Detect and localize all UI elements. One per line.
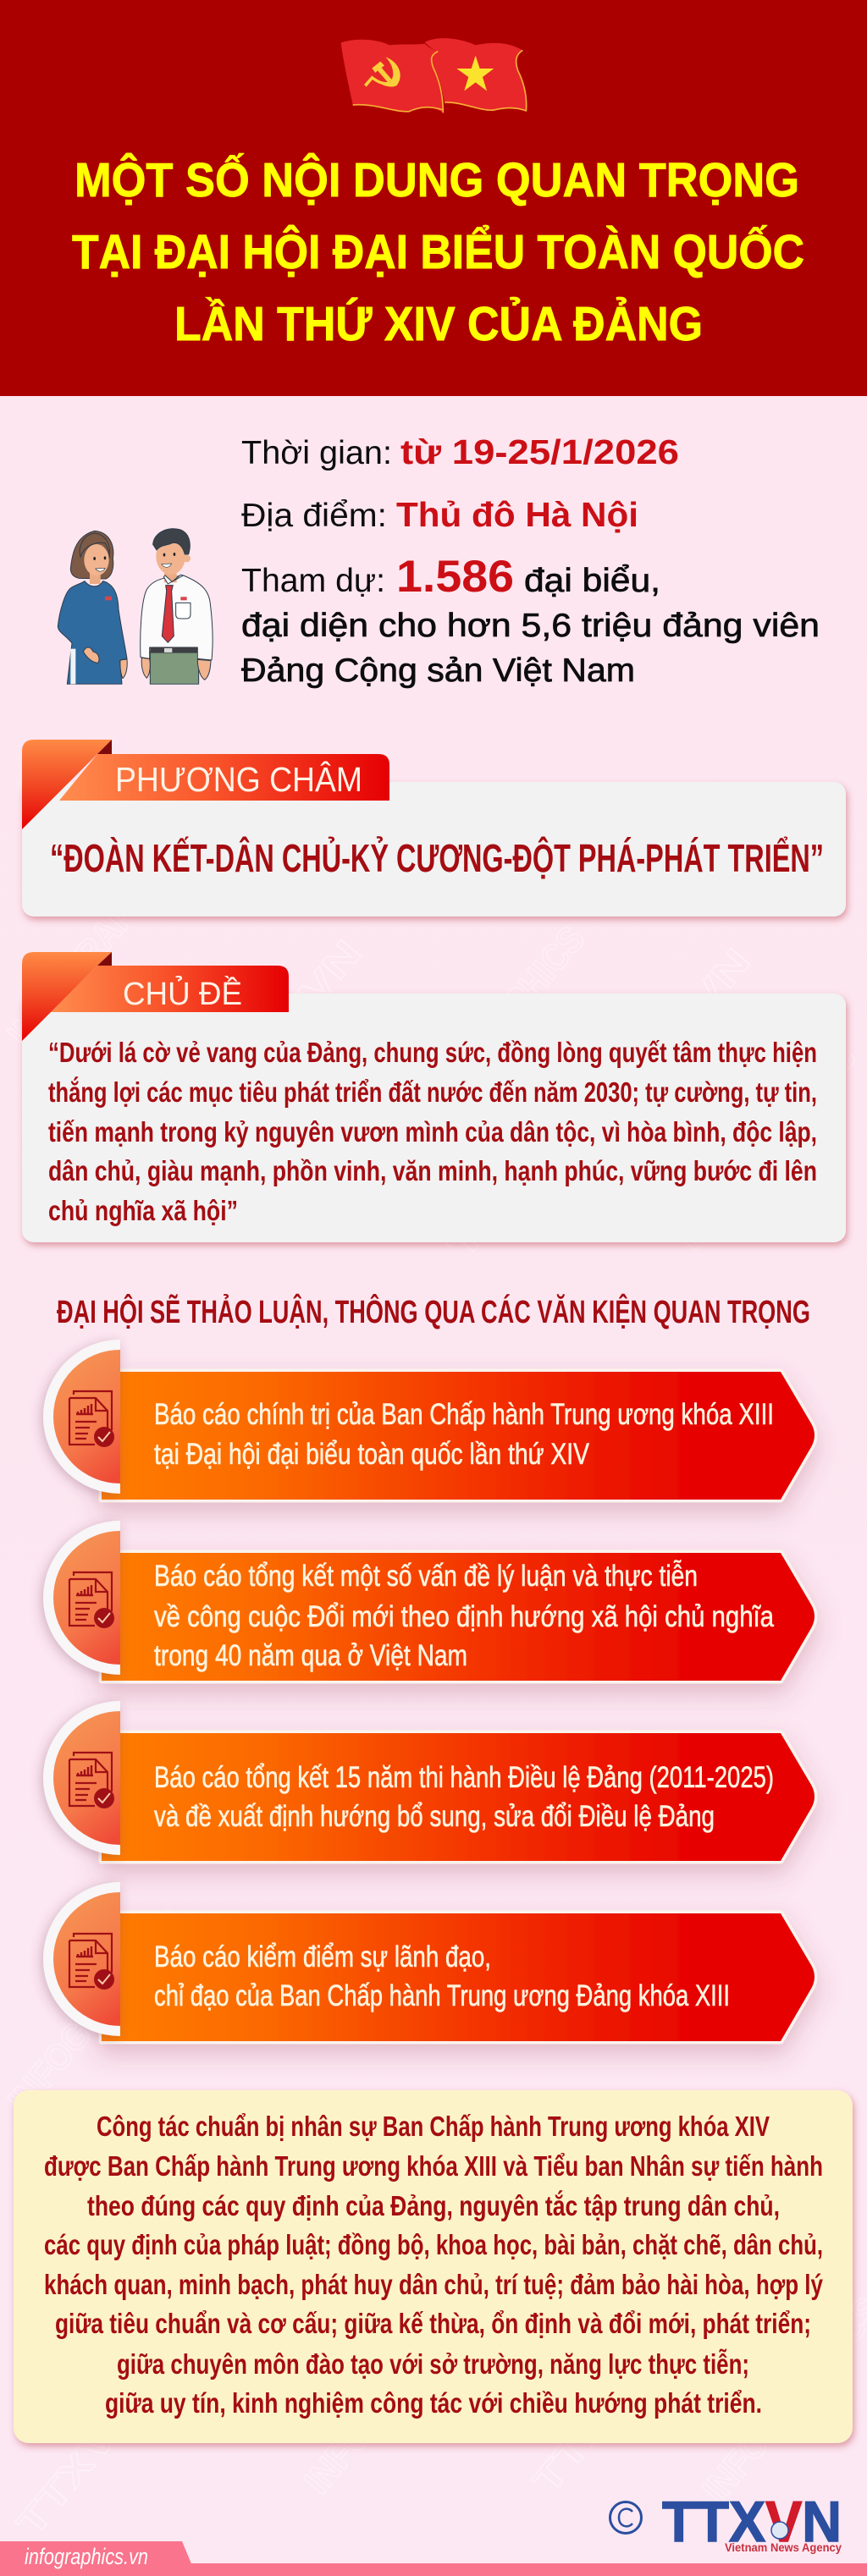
- title: LẦN THỨ XIV CỦA ĐẢNG: [174, 296, 703, 351]
- decorative watermark layer: TTXVN: [440, 1110, 581, 1266]
- time line: [241, 432, 679, 471]
- document item 4: [43, 1882, 815, 2041]
- icon: report document: [69, 1934, 114, 1990]
- icon: report document: [69, 1572, 114, 1628]
- attendance: đại biểu,: [524, 563, 660, 599]
- venue line: Địa điểm:: [241, 498, 387, 534]
- text: report 3: và đề xuất định hướng bổ sung, sửa đổi Điều lệ Đảng: [154, 1800, 715, 1833]
- text: report 2: Báo cáo tổng kết một số vấn đề lý luận và thực tiễn: [154, 1560, 698, 1593]
- decorative watermark layer: TTXVN: [8, 2388, 149, 2544]
- panel: personnel preparation note: [14, 2090, 853, 2443]
- text: report 4: [154, 1940, 730, 2012]
- text: report 1: [154, 1398, 774, 1471]
- venue line: [241, 495, 638, 534]
- text: report 3: [154, 1761, 774, 1833]
- decorative watermark layer: TTXVN: [525, 2346, 665, 2502]
- theme text: chủ nghĩa xã hội”: [48, 1195, 238, 1226]
- woman delegate: [58, 531, 127, 684]
- attendance: Tham dự:: [241, 563, 385, 599]
- illustration: two delegates: [58, 529, 213, 684]
- header banner: [0, 0, 867, 396]
- footer band: [0, 2541, 867, 2576]
- ribbon: chủ đề: CHỦ ĐỀ: [123, 975, 242, 1012]
- decorative watermark layer: TTXVN: [229, 933, 369, 1088]
- text: report 2: [154, 1560, 774, 1672]
- ribbon: phương châm: PHƯƠNG CHÂM: [115, 760, 362, 799]
- decorative watermark layer: INFOGRAPHICS: [0, 1900, 195, 2121]
- icon: party and national flags: [341, 38, 527, 113]
- theme text: [48, 1037, 817, 1226]
- footer source: infographics.vn: [25, 2544, 148, 2569]
- man delegate: [141, 529, 213, 684]
- document item 3: [43, 1701, 815, 1861]
- attendance: đại diện cho hơn 5,6 triệu đảng viên: [241, 608, 820, 644]
- icon: report document: [69, 1391, 114, 1447]
- venue line: Thủ đô Hà Nội: [396, 495, 638, 534]
- panel: chủ đề: [22, 952, 846, 1242]
- document item 2: [43, 1521, 815, 1681]
- attendance: Đảng Cộng sản Việt Nam: [241, 652, 635, 689]
- text: report 4: chỉ đạo của Ban Chấp hành Trung ương Đảng khóa XIII: [154, 1979, 730, 2012]
- note text: [44, 2111, 824, 2419]
- wordmark: TTXVN: [662, 2490, 842, 2554]
- decorative watermark layer: INFOGRAPHICS: [296, 2281, 491, 2502]
- text: report 4: Báo cáo kiểm điểm sự lãnh đạo,: [154, 1940, 491, 1973]
- icon: report document: [69, 1753, 114, 1808]
- text: report 1: tại Đại hội đại biểu toàn quốc lần thứ XIV: [154, 1438, 590, 1471]
- tagline: Vietnam News Agency: [725, 2540, 842, 2554]
- decorative watermark layer: INFOGRAPHICS: [398, 918, 593, 1139]
- decorative watermark layer: INFOGRAPHICS: [0, 834, 195, 1054]
- title: TẠI ĐẠI HỘI ĐẠI BIỂU TOÀN QUỐC: [72, 224, 804, 279]
- event information: [241, 432, 820, 689]
- time line: Thời gian:: [241, 435, 392, 471]
- decorative watermark layer: [0, 834, 867, 2544]
- time line: từ 19-25/1/2026: [400, 432, 679, 471]
- text: report 2: trong 40 năm qua ở Việt Nam: [154, 1639, 467, 1672]
- attendance: [241, 552, 820, 689]
- ribbon: chủ đề: [22, 952, 289, 1041]
- title: [72, 152, 804, 351]
- ribbon: phương châm: [22, 740, 389, 829]
- document item 1: [43, 1340, 815, 1500]
- decorative watermark layer: TTXVN: [93, 1076, 234, 1232]
- decorative watermark layer: TTXVN: [618, 941, 759, 1097]
- logo: TTXVN copyright: [610, 2490, 842, 2554]
- panel: phương châm: [22, 740, 846, 916]
- title: MỘT SỐ NỘI DUNG QUAN TRỌNG: [75, 152, 799, 207]
- attendance: 1.586: [396, 552, 514, 602]
- icon: copyright: [610, 2502, 642, 2534]
